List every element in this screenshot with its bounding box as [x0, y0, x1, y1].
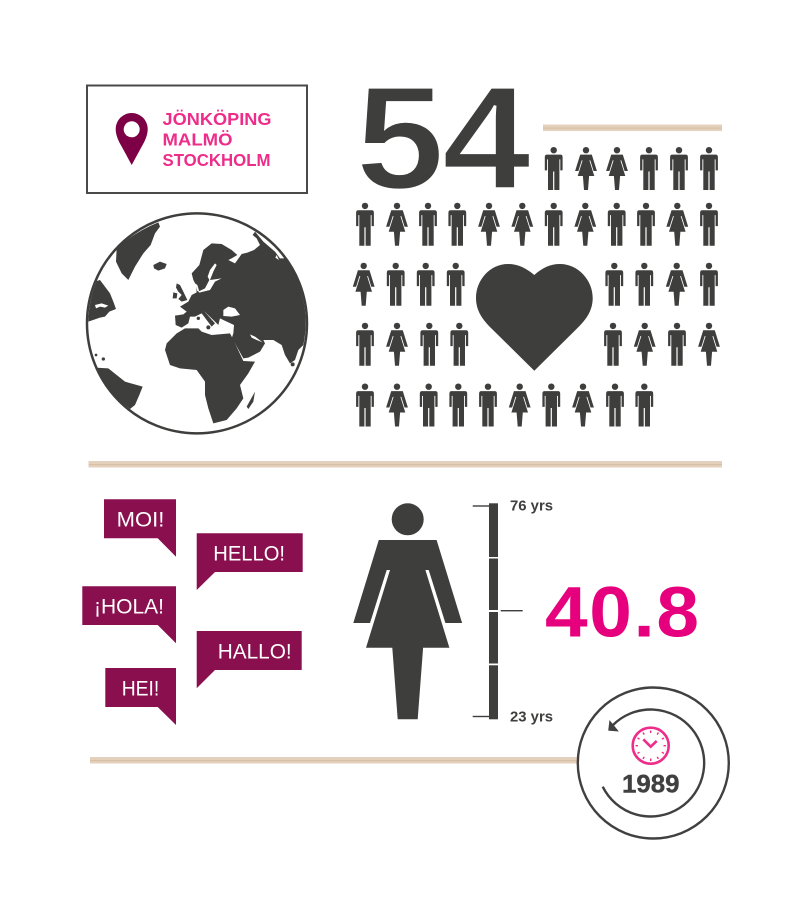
speech bubble: HOLA	[82, 586, 176, 643]
number 54: 54	[356, 56, 530, 220]
icon: woman figure	[353, 503, 462, 719]
location box	[87, 86, 307, 193]
speech bubble: HOLA: ¡HOLA!	[94, 594, 164, 618]
speech bubble: HEI: HEI!	[122, 677, 159, 701]
people row 3	[353, 263, 718, 306]
people row 2	[356, 203, 718, 246]
speech bubble: MOI: MOI!	[117, 508, 164, 532]
icon: heart	[476, 264, 593, 371]
shelf: lower	[90, 757, 580, 764]
year label: 1989	[622, 771, 680, 799]
speech bubble: HELLO	[197, 533, 303, 590]
speech bubble: HELLO: HELLO!	[213, 542, 285, 566]
icon: map pin	[116, 113, 148, 165]
age scale	[473, 503, 523, 719]
city names: JÖNKÖPING	[162, 109, 272, 129]
label: 76 yrs: 76 yrs	[510, 498, 553, 515]
number 40.8: 40.8	[545, 572, 701, 652]
people row 1	[545, 147, 718, 190]
shelf: upper right	[543, 124, 722, 131]
people row 5	[356, 384, 653, 426]
shelf: middle divider	[88, 461, 722, 468]
speech bubble: HALLO: HALLO!	[218, 639, 292, 663]
city names: STOCKHOLM	[162, 150, 270, 170]
year badge	[578, 688, 729, 838]
city names: MALMÖ	[162, 130, 232, 150]
arrow: circular	[603, 709, 704, 816]
globe	[87, 213, 307, 433]
label: 23 yrs: 23 yrs	[510, 709, 553, 726]
speech bubble: HALLO	[197, 631, 302, 688]
city names	[162, 109, 272, 170]
speech bubble: MOI	[104, 499, 176, 557]
people row 4	[356, 323, 720, 366]
icon: clock	[633, 728, 669, 764]
speech bubble: HEI	[105, 668, 176, 725]
